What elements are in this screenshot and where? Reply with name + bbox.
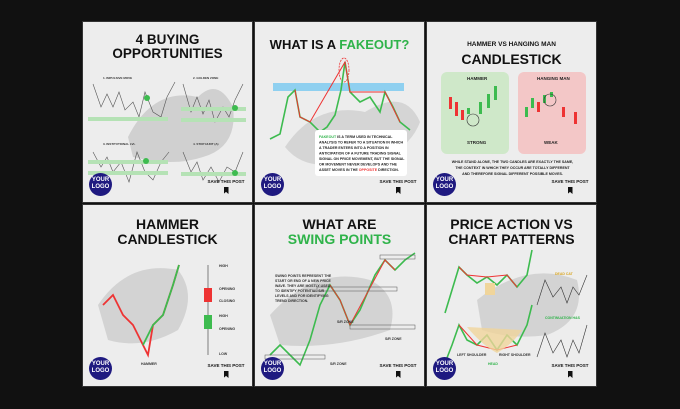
chart: fakeout: ANALYSIS TO REFER TO A SITUATION IN WHICH <box>319 140 403 144</box>
logo <box>433 173 456 196</box>
chart: hammer: OPENING <box>219 287 235 291</box>
title: SWING POINTS <box>288 231 391 247</box>
chart: swing points: SWING POINTS REPRESENT THE <box>275 274 332 278</box>
chart: two boxes <box>441 72 586 176</box>
chart: swing points <box>264 252 416 366</box>
chart: two boxes: THE CONTEXT IN WHICH THEY OCCUR ARE TOTALLY DIFFERENT <box>455 166 570 170</box>
save this post: SAVE THIS POST <box>552 363 588 368</box>
chart: fakeout: FAKEOUT IS A TERM USED IN TECHNICAL <box>319 135 393 139</box>
chart: fakeout <box>270 58 420 176</box>
logo <box>433 357 456 380</box>
logo <box>89 357 112 380</box>
logo: LOGO <box>264 368 281 374</box>
logo <box>261 357 284 380</box>
save this post <box>208 363 244 378</box>
save this post <box>380 363 416 378</box>
chart: hammer: LOW <box>219 352 228 356</box>
chart: four patterns: 3. INSTITUTIONAL LVL <box>103 142 136 146</box>
panel: hammer candlestick <box>82 204 253 387</box>
chart: swing points: TREND DIRECTION. <box>275 299 308 303</box>
chart: four patterns: 2. GOLDEN ZONE <box>193 76 218 80</box>
save this post <box>552 363 588 378</box>
title: CHART PATTERNS <box>448 231 575 247</box>
chart: fakeout: OR MOVEMENT NEVER DEVELOPS AND THE <box>319 162 398 166</box>
chart: two boxes: AND THEREFORE SIGNAL DIFFERENT POSSIBLE MOVES. <box>462 172 563 176</box>
logo: LOGO <box>92 368 109 374</box>
logo: YOUR <box>92 177 109 183</box>
logo: YOUR <box>436 177 453 183</box>
chart: hammer: OPENING <box>219 327 235 331</box>
chart: two boxes: STRONG <box>467 140 487 145</box>
panel: 4 buying opportunities <box>82 21 253 203</box>
panel: what is a fakeout <box>254 21 425 203</box>
logo <box>89 173 112 196</box>
chart: four patterns <box>88 76 246 183</box>
logo: YOUR <box>92 361 109 367</box>
panel: hammer vs hanging man <box>426 21 597 203</box>
save this post: SAVE THIS POST <box>208 179 244 184</box>
title: CANDLESTICK <box>461 51 562 67</box>
chart: swing points: LEVELS AND FOR IDENTIFYING <box>275 294 329 298</box>
logo: YOUR <box>436 361 453 367</box>
logo: LOGO <box>436 184 453 190</box>
logo: YOUR <box>264 361 281 367</box>
logo: LOGO <box>264 184 281 190</box>
chart: two boxes: WEAK <box>544 140 558 145</box>
title: CANDLESTICK <box>117 231 218 247</box>
save this post <box>552 179 588 194</box>
chart: swing points: S/R ZONE <box>385 337 402 341</box>
chart: two boxes: HAMMER <box>467 76 488 81</box>
chart: two boxes: WHILE STAND ALONE, THE TWO CANDLES ARE EXACTLY THE SAME, <box>452 160 573 164</box>
chart: swing points: S/R ZONE <box>330 362 347 366</box>
chart: patterns <box>444 250 588 366</box>
logo: LOGO <box>436 368 453 374</box>
chart: four patterns: 1. IMPULSIVE MOVE <box>103 76 132 80</box>
chart: swing points: START OR END OF A NEW PRICE <box>275 279 332 283</box>
panel: price action vs chart patterns <box>426 204 597 387</box>
logo: LOGO <box>92 184 109 190</box>
save this post: SAVE THIS POST <box>380 179 416 184</box>
title: HAMMER <box>136 216 199 232</box>
save this post: SAVE THIS POST <box>552 179 588 184</box>
logo <box>261 173 284 196</box>
title <box>288 216 391 247</box>
chart: hammer: HAMMER <box>141 362 157 366</box>
chart: hammer: CLOSING <box>219 299 235 303</box>
chart: fakeout: ASSET MOVES IN THE OPPOSITE DIRECTION. <box>319 168 399 172</box>
title: WHAT ARE <box>303 216 376 232</box>
title: PRICE ACTION VS <box>450 216 573 232</box>
chart: swing points: TO IDENTIFY POTENTIAL S/R <box>275 289 325 293</box>
chart: swing points: WAVE. THEY ARE MOSTLY USED <box>275 284 331 288</box>
subtitle: HAMMER VS HANGING MAN <box>467 41 556 48</box>
save this post <box>380 179 416 194</box>
chart: fakeout: SIGNAL ON PRICE MOVEMENT, BUT THE SIGNAL <box>319 157 405 161</box>
panel: swing points <box>254 204 425 387</box>
title <box>117 216 218 247</box>
chart: patterns: CONTINUATION H&S <box>545 316 581 320</box>
title: 4 BUYING <box>136 32 199 47</box>
save this post: SAVE THIS POST <box>380 363 416 368</box>
title <box>112 32 223 61</box>
chart: fakeout: A TRADER ENTERS INTO A POSITION IN <box>319 146 389 150</box>
title: WHAT IS A FAKEOUT? <box>270 37 409 52</box>
logo: YOUR <box>264 177 281 183</box>
chart: two boxes: HANGING MAN <box>537 76 570 81</box>
chart: four patterns: 4. STOP HUNT (A) <box>193 142 219 146</box>
chart: patterns: LEFT SHOULDER <box>457 353 487 357</box>
chart: swing points: S/R ZONE <box>337 320 354 324</box>
chart: fakeout: ANTICIPATION OF A FUTURE TRADING SIGNAL <box>319 152 402 156</box>
chart: patterns: HEAD <box>488 362 498 366</box>
chart: hammer: HIGH <box>219 264 228 268</box>
title <box>448 216 575 247</box>
save this post: SAVE THIS POST <box>208 363 244 368</box>
chart: patterns: DEAD CAT <box>555 272 574 276</box>
chart: hammer <box>98 264 235 366</box>
title: OPPORTUNITIES <box>112 46 223 61</box>
save this post <box>208 179 244 194</box>
chart: hammer: HIGH <box>219 314 228 318</box>
chart: patterns: RIGHT SHOULDER <box>499 353 531 357</box>
